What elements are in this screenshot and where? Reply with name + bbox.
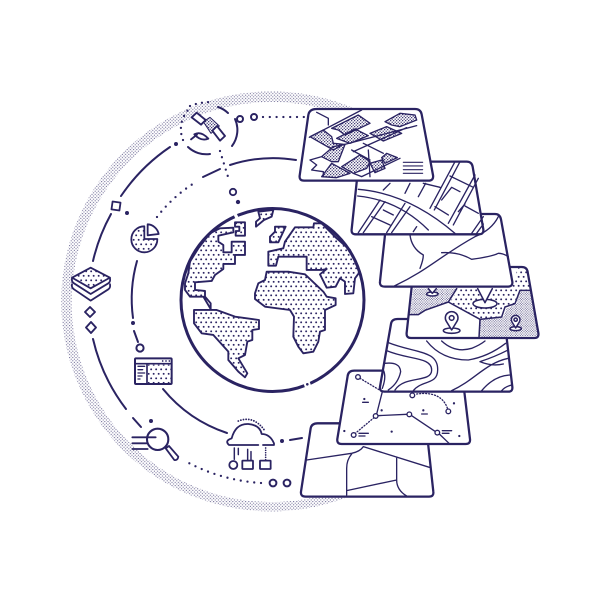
icon: pie chart	[131, 224, 159, 252]
layer 7: parcels map	[301, 423, 433, 497]
dotted link from satellite to globe	[220, 151, 239, 203]
icon: cloud network	[227, 419, 274, 469]
icon: stacked layers	[72, 268, 110, 301]
dotted crescent band	[61, 91, 362, 511]
icon: square node	[111, 201, 121, 211]
globe	[181, 208, 364, 392]
continents	[185, 210, 360, 377]
layer 3: rivers map	[380, 214, 512, 287]
icon: browser window	[135, 358, 172, 384]
layer 1: isometric city map	[300, 109, 433, 181]
layer 4: location pins map	[407, 267, 538, 338]
layer 2: street map	[352, 162, 483, 234]
layer 5: contour map	[380, 319, 512, 392]
icon: satellite with dashed ring	[181, 102, 237, 154]
icon: diamonds	[85, 307, 96, 333]
globe outline	[181, 208, 364, 392]
outer orbit	[93, 114, 305, 486]
inner orbit	[132, 158, 302, 442]
layer 6: network map	[337, 371, 470, 444]
icon: magnifier with speed lines	[132, 429, 178, 460]
